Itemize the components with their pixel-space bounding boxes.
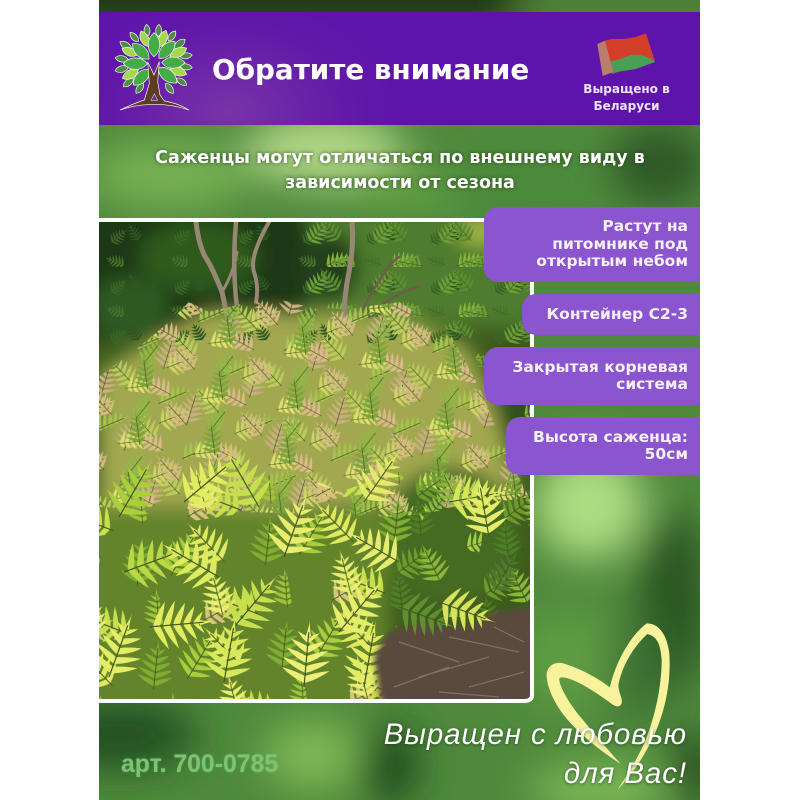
- text: seasonal notice: [154, 148, 645, 193]
- icon: hand-drawn heart: [546, 623, 670, 790]
- panel: info pill open sky: питомнике под: [552, 235, 688, 253]
- background foliage texture: [99, 217, 536, 347]
- panel: info pill open sky: открытым небом: [536, 252, 688, 270]
- text: grown in Belarus: Выращено в: [583, 82, 670, 96]
- panel: info pill open sky: Растут на: [602, 217, 688, 235]
- text: article number: арт. 700-0785: [121, 751, 278, 778]
- panel: plant photo: [99, 218, 534, 703]
- tree trunks: [196, 222, 419, 325]
- heading: Обратите внимание: [212, 53, 529, 86]
- panel: info pill root system: Закрытая корневая: [512, 358, 688, 376]
- text: grown in Belarus: [583, 82, 670, 113]
- panel: info pill container: Контейнер С2-3: [547, 305, 688, 323]
- panel: info pill height: 50см: [645, 445, 688, 463]
- panel: info pill root system: [484, 347, 700, 405]
- panel: info pill root system: система: [616, 375, 688, 393]
- upper shrub foliage: [99, 297, 529, 517]
- panel: info pill height: Высота саженца:: [533, 428, 688, 446]
- panel: purple header band: [99, 12, 700, 125]
- text: seasonal notice: Саженцы могут отличаться по внешнему виду в: [155, 148, 645, 168]
- icon: Belarus flag: [597, 33, 655, 76]
- text: grown with love: для Вас!: [564, 757, 687, 790]
- panel: info pill open sky: [484, 207, 700, 282]
- large fronds: [99, 448, 508, 688]
- text: seasonal notice: зависимости от сезона: [285, 173, 515, 193]
- lower shrub foliage: [389, 457, 536, 617]
- soil: [370, 606, 530, 699]
- text: grown in Belarus: Беларуси: [593, 99, 660, 113]
- icon: tree logo: [114, 24, 193, 110]
- text: grown with love: [384, 718, 687, 790]
- panel: info pill height: [506, 417, 700, 475]
- text: grown with love: Выращен с любовью: [384, 718, 687, 751]
- panel: info pill container: [522, 294, 700, 335]
- panel: blurred green background: [99, 0, 700, 800]
